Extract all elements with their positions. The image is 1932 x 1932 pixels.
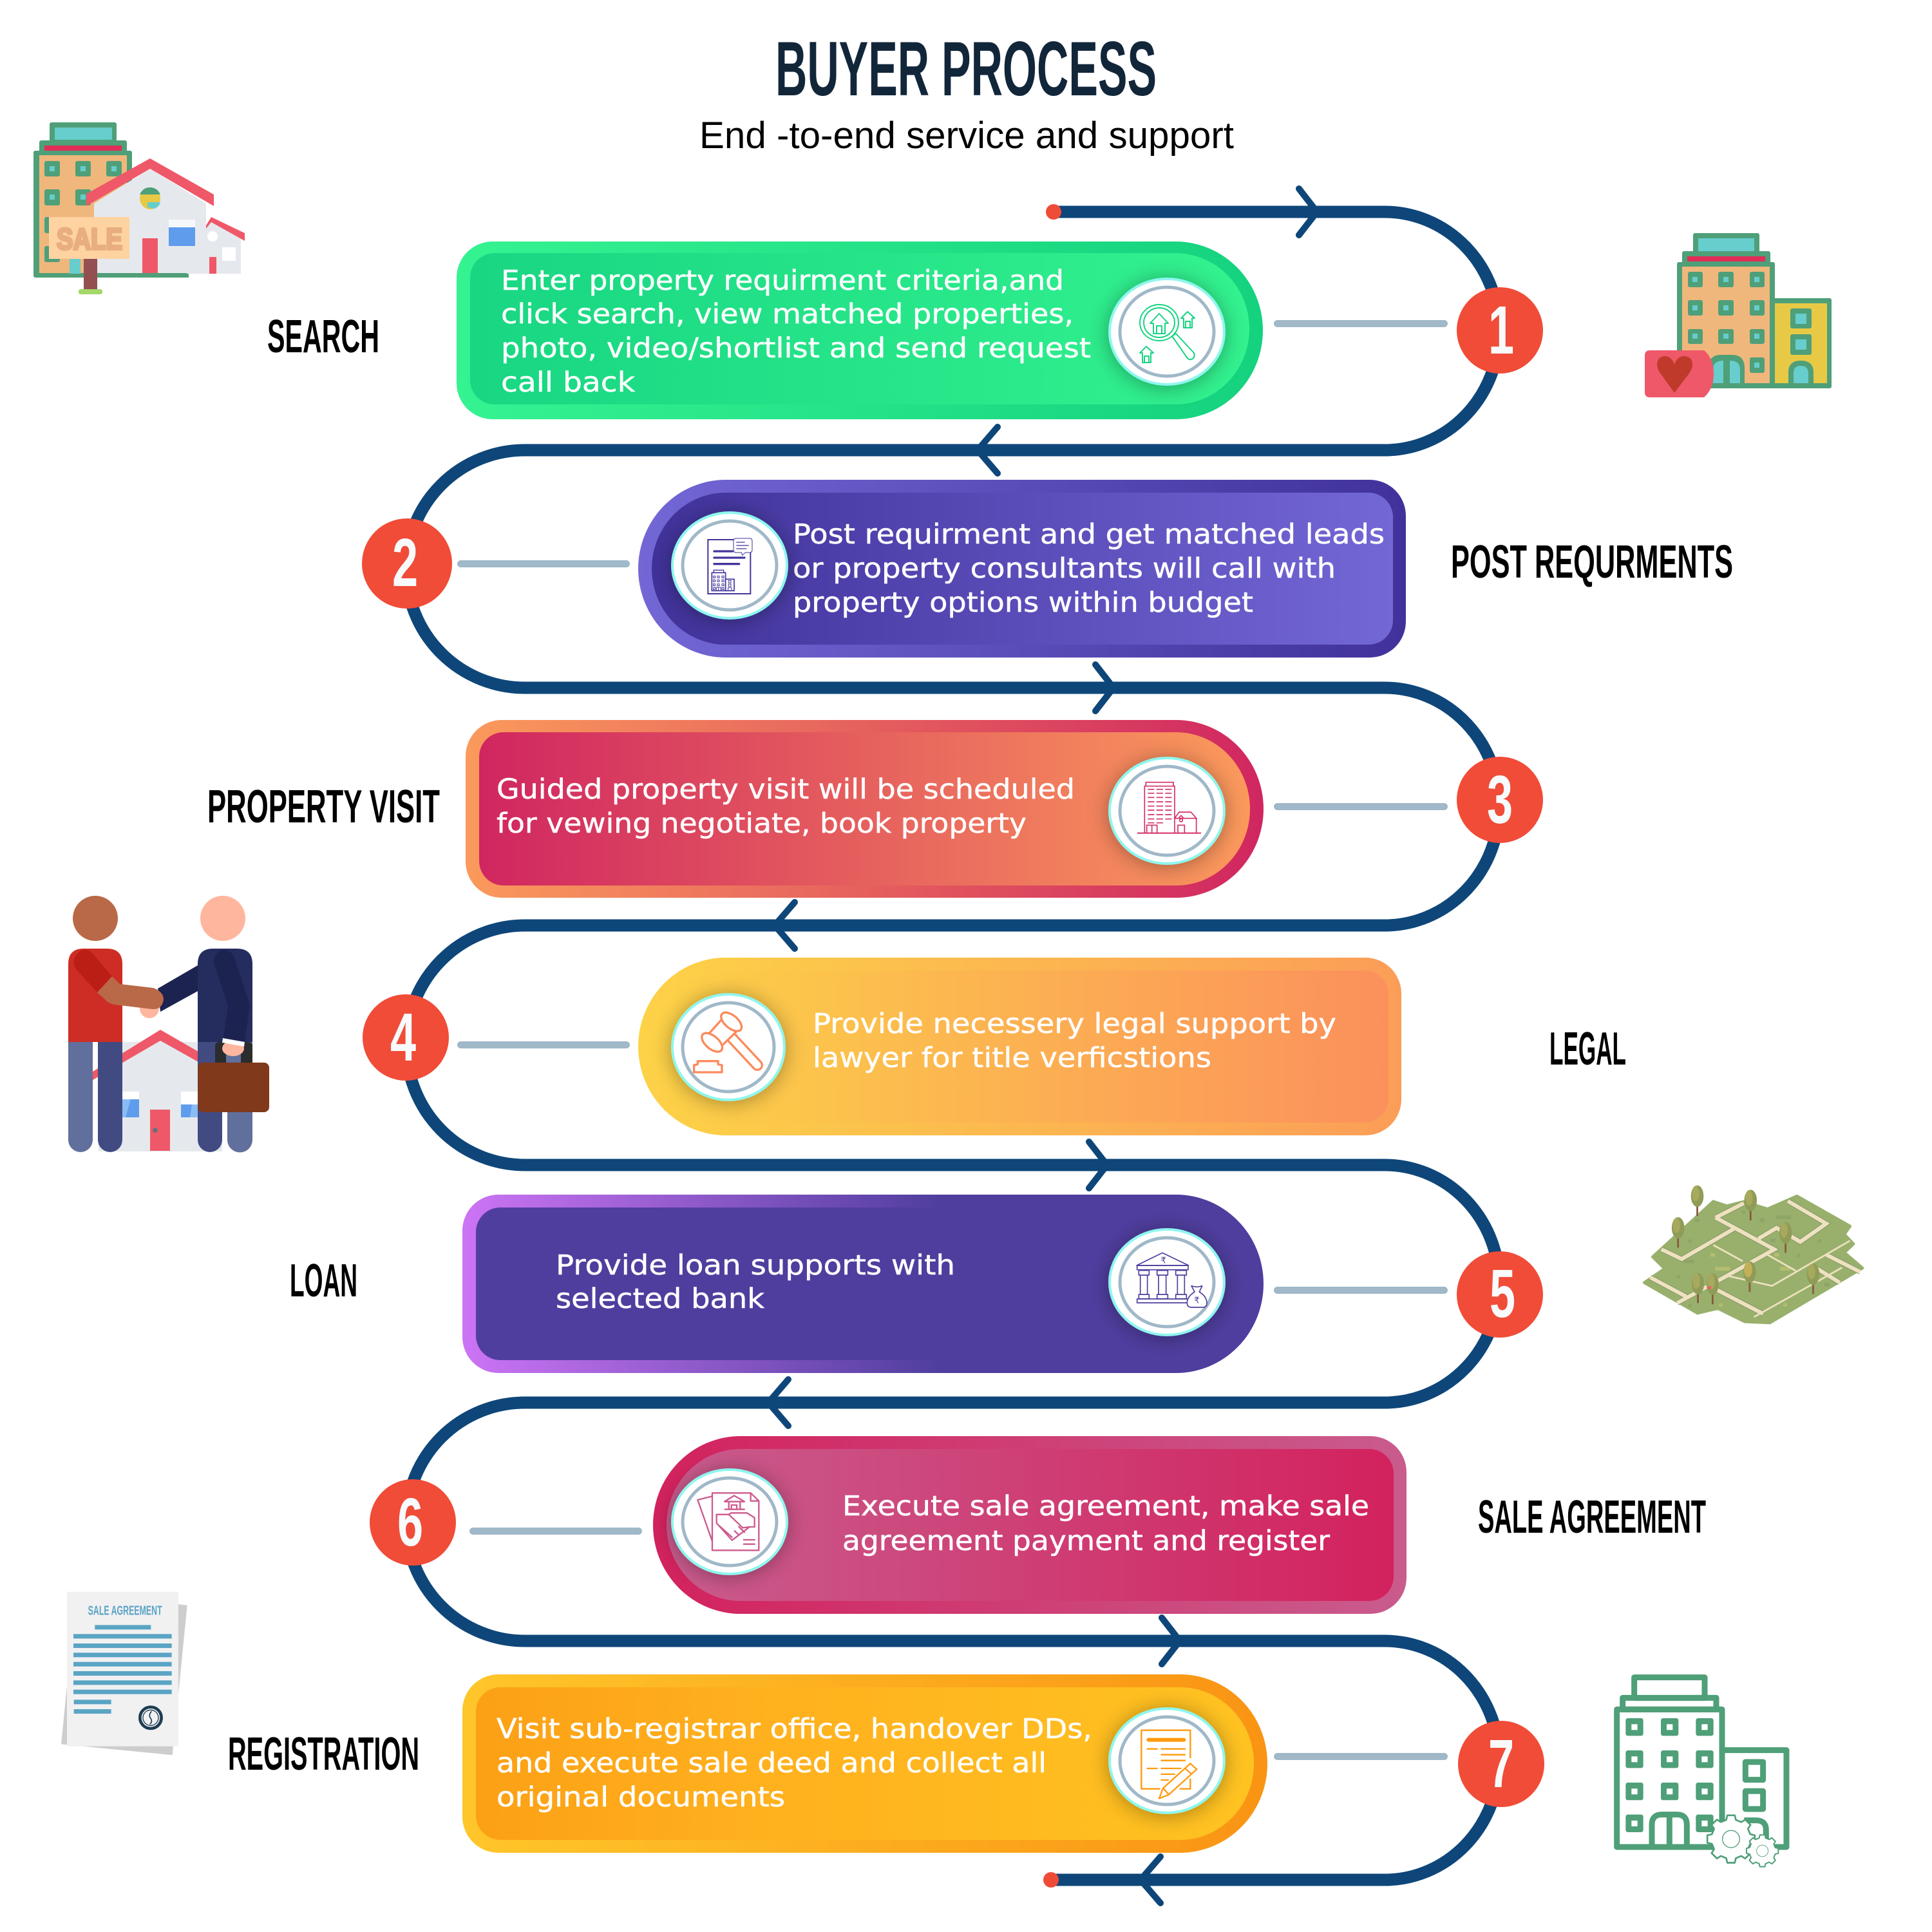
number badge 3	[1457, 757, 1543, 843]
number badge 6	[370, 1479, 456, 1566]
serpentine process path	[406, 189, 1499, 1903]
label: sale agreement: SALE AGREEMENT	[1478, 1492, 1706, 1543]
panel: step 4 legal	[638, 958, 1401, 1135]
illustration: handshake and house	[68, 896, 269, 1153]
label: property visit: PROPERTY VISIT	[207, 781, 440, 833]
icon: tower and house	[1137, 782, 1201, 833]
title: BUYER PROCESS	[775, 26, 1157, 112]
illustration: outlined building with gears	[1617, 1678, 1786, 1867]
number badge 1	[1457, 287, 1543, 374]
icon: form and pencil	[1141, 1730, 1197, 1799]
panel: step 1 search: click search, view matched properties,	[501, 298, 1074, 330]
number badge 5: 5	[1490, 1256, 1515, 1332]
number badge 3: 3	[1487, 762, 1513, 838]
connector bars	[457, 320, 1448, 1760]
panel: step 1 search: call back	[501, 366, 635, 399]
panel: step 6 sale agreement: Execute sale agreement, make sale	[842, 1490, 1369, 1522]
label: loan: LOAN	[290, 1255, 357, 1307]
panel: step 7 registration: Visit sub-registrar office, handover DDs,	[497, 1713, 1092, 1745]
number badge 6: 6	[397, 1484, 423, 1560]
panel: step 5 loan: selected bank	[556, 1283, 764, 1315]
number badge 7: 7	[1488, 1726, 1514, 1802]
panel: step 3 property visit	[466, 720, 1264, 898]
panel: step 2 post requirements	[638, 480, 1406, 658]
number badge 5	[1457, 1251, 1543, 1338]
icon: bank and money bag: ₹	[1160, 1256, 1166, 1266]
illustration: sale agreement document: SALE AGREEMENT	[88, 1603, 162, 1618]
illustration: houses for sale	[33, 122, 245, 294]
icon: contract with handshake	[697, 1493, 759, 1550]
number badge 4: 4	[390, 999, 416, 1075]
label: registration: REGISTRATION	[228, 1728, 419, 1780]
number badge 7	[1458, 1721, 1544, 1807]
text: LEGAL	[1549, 1023, 1626, 1075]
panel: step 2 post requirements: property options within budget	[793, 587, 1253, 619]
label: search: SEARCH	[267, 311, 379, 363]
panel: step 4 legal: lawyer for title verficstions	[813, 1042, 1211, 1074]
icon: gavel	[694, 1009, 757, 1072]
illustration: building with heart	[1645, 233, 1832, 397]
panel: step 6 sale agreement: agreement payment and register	[842, 1525, 1330, 1557]
panel: step 6 sale agreement	[653, 1436, 1406, 1614]
panel: step 4 legal: Provide necessery legal support by	[813, 1008, 1336, 1040]
number badge 2	[362, 518, 452, 609]
panel: step 7 registration: original documents	[497, 1781, 785, 1814]
illustration: land plots map	[1644, 1186, 1862, 1323]
number badge 2: 2	[392, 525, 418, 601]
panel: step 2 post requirements: or property consultants will call with	[793, 553, 1336, 585]
icon: bank and money bag	[1137, 1253, 1207, 1307]
icon: magnifier over house	[1140, 305, 1195, 363]
icon: bank and money bag: ₹	[1194, 1296, 1200, 1305]
panel: step 5 loan	[462, 1195, 1264, 1373]
label: post requirements: POST REQURMENTS	[1451, 536, 1733, 588]
panel: step 1 search: photo, video/shortlist and send request	[501, 332, 1091, 365]
number badge 1: 1	[1488, 292, 1514, 368]
panel: step 7 registration	[462, 1674, 1267, 1853]
panel: step 5 loan: Provide loan supports with	[556, 1249, 955, 1282]
panel: step 1 search	[457, 242, 1263, 419]
panel: step 7 registration: and execute sale deed and collect all	[497, 1747, 1046, 1779]
icon: document with building	[708, 538, 752, 594]
panel: step 3 property visit: Guided property visit will be scheduled	[497, 773, 1075, 806]
subtitle: End -to-end service and support	[699, 115, 1234, 156]
panel: step 3 property visit: for vewing negotiate, book property	[497, 808, 1027, 840]
panel: step 2 post requirements: Post requirment and get matched leads	[793, 518, 1385, 551]
illustration: houses for sale: SALE	[57, 222, 122, 256]
number badge 4	[363, 994, 449, 1081]
panel: step 1 search: Enter property requirment criteria,and	[501, 265, 1064, 297]
illustration: sale agreement document	[61, 1592, 187, 1755]
